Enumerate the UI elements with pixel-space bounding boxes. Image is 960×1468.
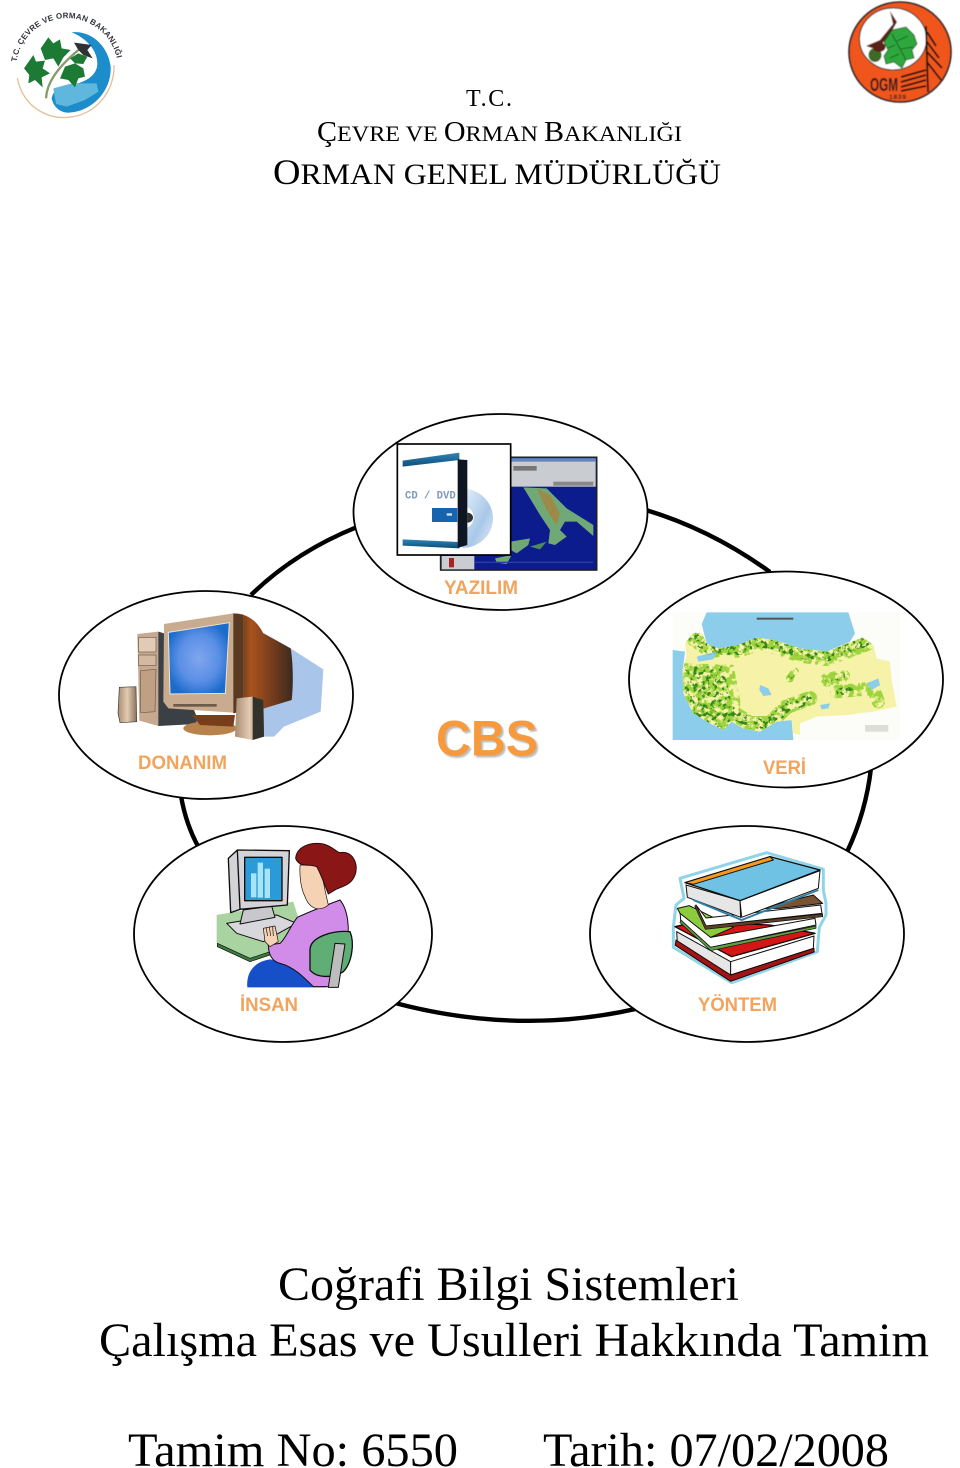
title line 2: Çalışma Esas ve Usulleri Hakkında Tamim (99, 1314, 929, 1367)
central label: CBS: CBS (438, 712, 540, 768)
light green woodland (683, 638, 878, 732)
line 3: ORMAN GENEL MÜDÜRLÜĞÜ (273, 152, 721, 192)
logo: OGM (849, 2, 951, 102)
node: YÖNTEM (590, 826, 904, 1042)
halo (673, 853, 826, 983)
icon: stack of books (673, 853, 826, 983)
leaves (24, 37, 87, 87)
lakes and marmara (697, 652, 880, 709)
pine tree (901, 26, 942, 92)
oak leaf (884, 27, 917, 68)
green book (680, 912, 816, 947)
acorn branch (866, 11, 897, 48)
software map window (441, 457, 597, 570)
label: YAZILIM (444, 578, 518, 599)
logo lettering: T.C. ÇEVRE VE ORMAN BAKANLIĞI (11, 12, 122, 62)
node: YAZILIM (354, 414, 648, 610)
orange disc (849, 2, 951, 102)
label: YÖNTEM (698, 995, 777, 1016)
OGM lettering: OGM (870, 75, 898, 95)
logo: T.C. Çevre ve Orman Bakanlığı (11, 12, 122, 118)
node: DONANIM (59, 591, 353, 799)
logo artwork (17, 32, 114, 118)
CD/DVD box: CD / DVD (405, 491, 456, 503)
brown book (696, 905, 822, 926)
header: institution names (273, 86, 721, 192)
document title (99, 1258, 929, 1367)
line 2: ÇEVRE VE ORMAN BAKANLIĞI (317, 117, 682, 148)
title line 1: Coğrafi Bilgi Sistemleri (278, 1258, 739, 1311)
red book (675, 922, 815, 957)
line 1: T.C. (466, 86, 512, 112)
label: İNSAN (240, 995, 298, 1016)
Turkey silhouette (53, 83, 98, 107)
node: İNSAN (134, 826, 432, 1042)
CD/DVD box (397, 444, 511, 555)
icon: desktop computer (118, 613, 323, 740)
map of Turkey forests (673, 612, 900, 740)
dark green forest (685, 637, 865, 730)
tree stem (46, 50, 78, 98)
label: DONANIM (138, 753, 227, 774)
bird (74, 43, 93, 58)
ring connecting the five components (181, 510, 871, 1021)
label: VERİ (763, 758, 806, 779)
blue book (686, 885, 741, 917)
year: 1839 (889, 94, 906, 101)
central label: CBS: CBS (436, 710, 538, 766)
ring (17, 65, 114, 118)
node: VERİ (629, 572, 943, 788)
blue crescent (52, 32, 111, 113)
icon: person at computer (217, 843, 356, 987)
circular number and date (128, 1424, 889, 1468)
white inner circle (860, 8, 926, 70)
